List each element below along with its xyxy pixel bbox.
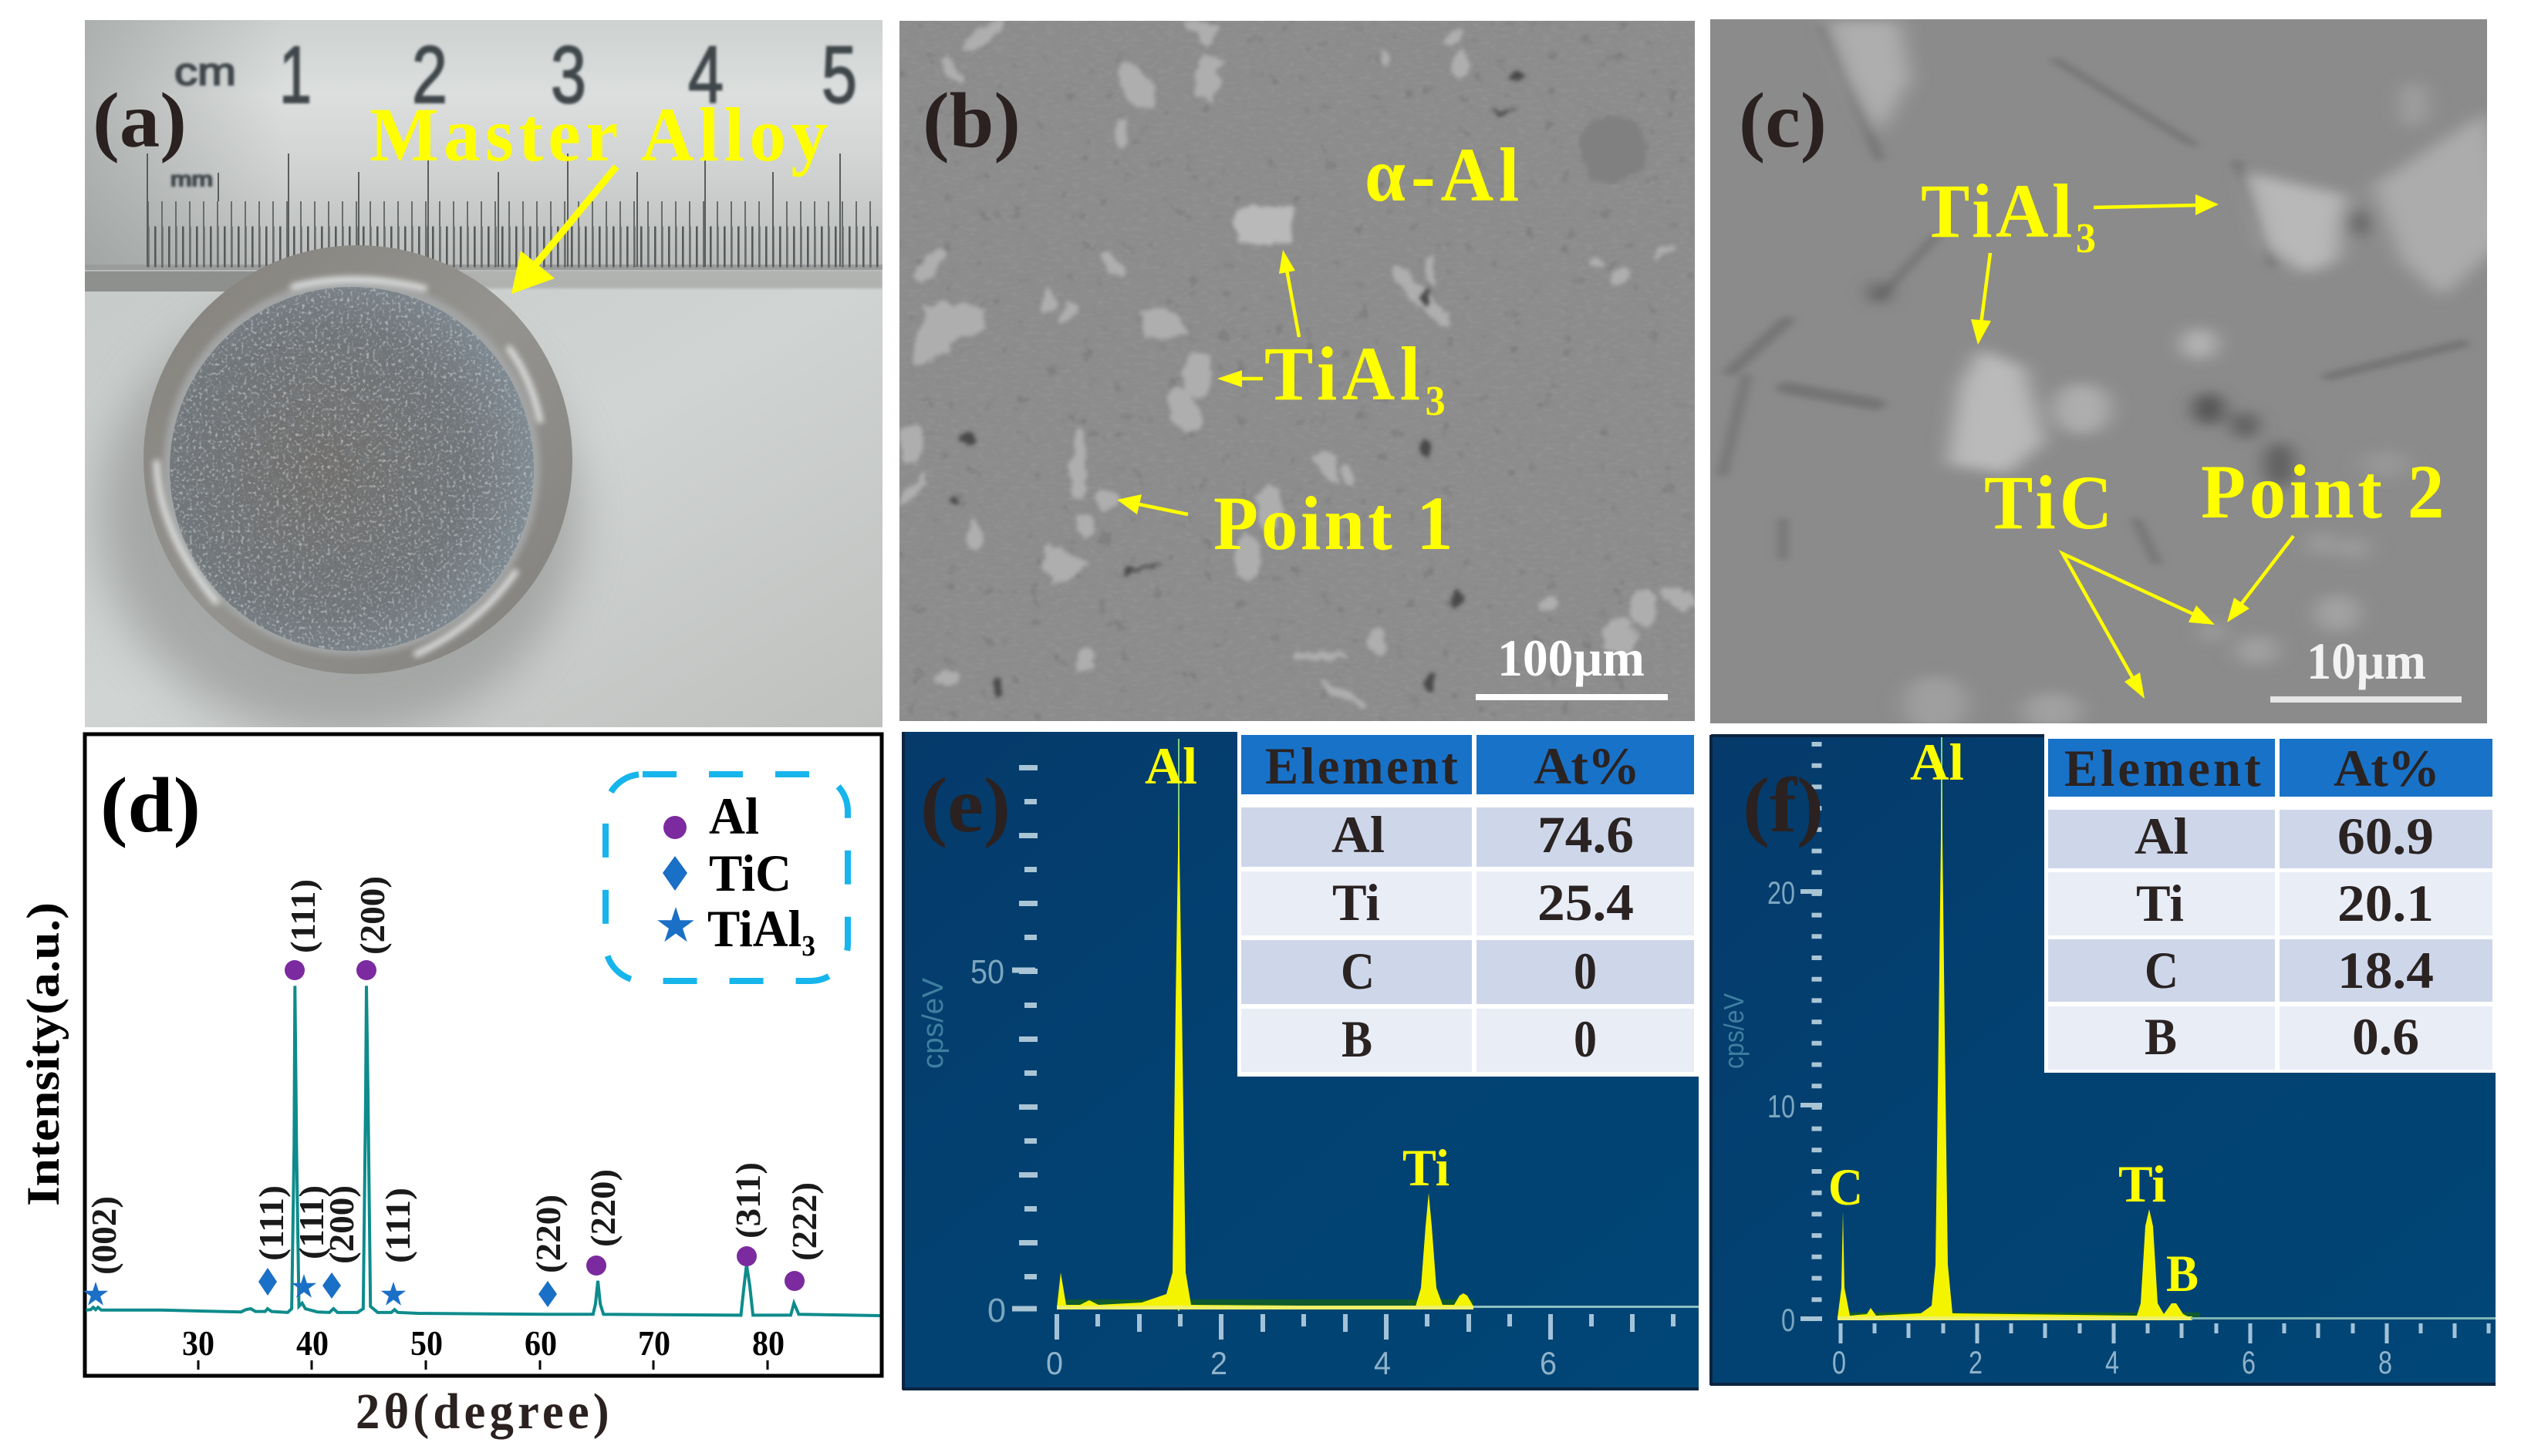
x tick labels — [182, 1323, 785, 1363]
table f text — [2064, 739, 2440, 1066]
label: TiC: TiC — [1984, 460, 2112, 546]
peak index labels: (200) — [353, 876, 392, 955]
ruler labels: 5 — [822, 30, 857, 120]
label (a): (a) — [93, 77, 187, 164]
table f text: 60.9 — [2337, 807, 2434, 865]
table f text: C — [2145, 941, 2178, 999]
table e text — [1265, 736, 1640, 1068]
scale bar 10 um — [2270, 632, 2462, 703]
ruler labels: 1 — [279, 30, 312, 120]
label: TiAl3: 3 — [1426, 377, 1446, 424]
label (c): (c) — [1739, 77, 1827, 164]
peak label Ti: Ti — [1402, 1138, 1449, 1197]
peak index labels: (220) — [528, 1195, 568, 1273]
label (e): (e) — [920, 762, 1011, 849]
label (f): (f) — [1743, 762, 1824, 849]
TiAl3 markers — [83, 1274, 406, 1306]
label: Point 1: Point 1 — [1213, 481, 1453, 567]
arrow: master alloy — [511, 167, 616, 294]
table f text: Element — [2064, 740, 2261, 797]
label (b): (b) — [923, 77, 1021, 164]
x axis labels — [1832, 1344, 2392, 1380]
y axis labels: 20 — [1767, 875, 1795, 911]
y axis labels — [1718, 875, 1795, 1338]
legend — [606, 774, 848, 981]
x tick labels: 30 — [182, 1323, 214, 1363]
x axis labels: 6 — [1540, 1345, 1557, 1381]
desk background — [85, 268, 883, 727]
x axis labels: 2 — [1210, 1345, 1227, 1381]
spectrum — [1838, 737, 2496, 1320]
plot frame — [85, 734, 882, 1376]
table f text: B — [2145, 1007, 2177, 1066]
peak index labels: (220) — [583, 1169, 623, 1247]
peak index labels: (111) — [378, 1188, 417, 1263]
table e — [1237, 732, 1699, 1077]
label: alpha-Al: α-Al — [1365, 133, 1519, 218]
table f text: 0.6 — [2352, 1007, 2419, 1066]
y axis labels: cps/eV — [917, 977, 950, 1069]
panel d: XRD pattern — [18, 734, 882, 1439]
panel a: photo of master alloy on ruler — [85, 20, 883, 736]
scale bar 100 um: 100µm — [1497, 629, 1645, 687]
x axis labels: 0 — [1046, 1345, 1063, 1381]
panel c: high magnification SEM — [1710, 19, 2514, 732]
panel f: EDS spectrum Point 2 — [1710, 733, 2496, 1385]
label: TiAl3: TiAl — [1264, 332, 1420, 417]
x axis labels: 4 — [1374, 1345, 1391, 1381]
arrow to TiAl3 particle — [1217, 370, 1263, 387]
ruler shadow — [85, 270, 883, 292]
y axis labels: cps/eV — [1718, 993, 1750, 1069]
y axis labels — [917, 953, 1006, 1330]
y axis ticks — [1800, 742, 1822, 1320]
ruler labels: cm — [174, 50, 236, 93]
peak label Al: Al — [1910, 733, 1964, 791]
table f text: Ti — [2136, 874, 2184, 932]
table f text: 18.4 — [2337, 941, 2434, 999]
ruler labels — [170, 30, 857, 190]
x axis labels: 2 — [1969, 1344, 1983, 1380]
x axis labels: 4 — [2105, 1344, 2119, 1380]
ruler labels: 2 — [412, 30, 447, 120]
TiC markers — [258, 1268, 557, 1307]
scale bar 10 um: 10µm — [2307, 632, 2426, 690]
dark needle phases — [1723, 28, 2462, 562]
panel b: SEM micrograph — [895, 15, 1703, 721]
table e text: 25.4 — [1537, 873, 1634, 932]
peak index labels: (311) — [728, 1162, 768, 1239]
x tick labels: 70 — [638, 1323, 670, 1363]
peak index labels: (111) — [251, 1185, 291, 1261]
table e text: 74.6 — [1537, 805, 1634, 864]
x axis labels: 8 — [2378, 1344, 2392, 1380]
TiAl3 particles — [895, 15, 1703, 710]
peak label C: C — [1828, 1158, 1863, 1216]
arrow to large particle — [1279, 250, 1299, 337]
label (d): (d) — [100, 762, 201, 849]
panel e: EDS spectrum Point 1 — [903, 732, 1699, 1390]
x ticks — [198, 1360, 768, 1370]
table e text: Element — [1265, 738, 1458, 795]
table f text: At% — [2334, 739, 2440, 797]
peak label B: B — [2166, 1244, 2199, 1303]
peak index labels — [84, 876, 824, 1275]
y axis ticks — [1012, 765, 1037, 1309]
y axis labels: 10 — [1767, 1088, 1795, 1124]
arrow to Point 1 — [1117, 494, 1188, 514]
table e text: At% — [1534, 736, 1640, 795]
x axis labels: 0 — [1832, 1344, 1846, 1380]
peak index labels: (200) — [322, 1185, 361, 1264]
legend: TiC — [709, 844, 791, 902]
y axis labels: 0 — [987, 1292, 1006, 1330]
y axis labels: 0 — [1781, 1302, 1795, 1338]
y axis title: Intensity(a.u.) — [18, 902, 69, 1206]
particles — [1827, 21, 2514, 732]
legend: 3 — [802, 930, 815, 962]
label: Point 2: Point 2 — [2201, 450, 2444, 535]
coin: master alloy — [100, 245, 579, 736]
dark pores — [952, 72, 1526, 698]
peak label Ti: Ti — [2118, 1154, 2166, 1213]
ruler labels: 4 — [688, 30, 724, 120]
XRD curve — [86, 986, 880, 1316]
legend: Al — [709, 787, 759, 845]
table e text: 0 — [1574, 942, 1597, 1000]
x axis title: 2θ(degree) — [356, 1384, 609, 1439]
x axis ticks — [1841, 1323, 2489, 1343]
x tick labels: 60 — [525, 1323, 557, 1363]
scale bar 100 um — [1476, 629, 1668, 700]
table e text: Al — [1331, 805, 1385, 864]
ruler labels: mm — [170, 167, 213, 190]
y axis labels: 50 — [970, 953, 1004, 991]
peak index labels: (111) — [292, 1185, 331, 1259]
x tick labels: 50 — [410, 1323, 443, 1363]
arrows: TiC and Point 2 — [2063, 536, 2293, 699]
x tick labels: 80 — [752, 1323, 785, 1363]
peak index labels: (222) — [785, 1182, 824, 1261]
x axis labels — [1046, 1345, 1557, 1381]
label: TiAl3: 3 — [2076, 214, 2096, 261]
x axis ticks — [1057, 1314, 1673, 1340]
legend: TiAl — [707, 899, 808, 958]
Al markers — [285, 960, 805, 1291]
peak index labels: (111) — [283, 879, 322, 953]
x tick labels: 40 — [296, 1323, 329, 1363]
table f text: 20.1 — [2337, 874, 2434, 932]
x axis labels: 6 — [2242, 1344, 2256, 1380]
table e text: 0 — [1574, 1009, 1597, 1068]
peak index labels: (002) — [84, 1196, 123, 1275]
ruler labels: 3 — [551, 30, 586, 120]
spectrum — [1057, 739, 1699, 1311]
arrows: TiAl3 — [1971, 194, 2219, 345]
label: TiAl3: TiAl — [1921, 169, 2072, 254]
table e text: B — [1341, 1009, 1372, 1068]
table f text: Al — [2135, 807, 2189, 865]
table e text: C — [1341, 942, 1375, 1000]
table f — [2044, 735, 2496, 1073]
ruler — [85, 20, 883, 270]
peak label Al: Al — [1145, 736, 1197, 795]
label: Master Alloy: Master Alloy — [370, 93, 828, 178]
table e text: Ti — [1332, 873, 1380, 932]
